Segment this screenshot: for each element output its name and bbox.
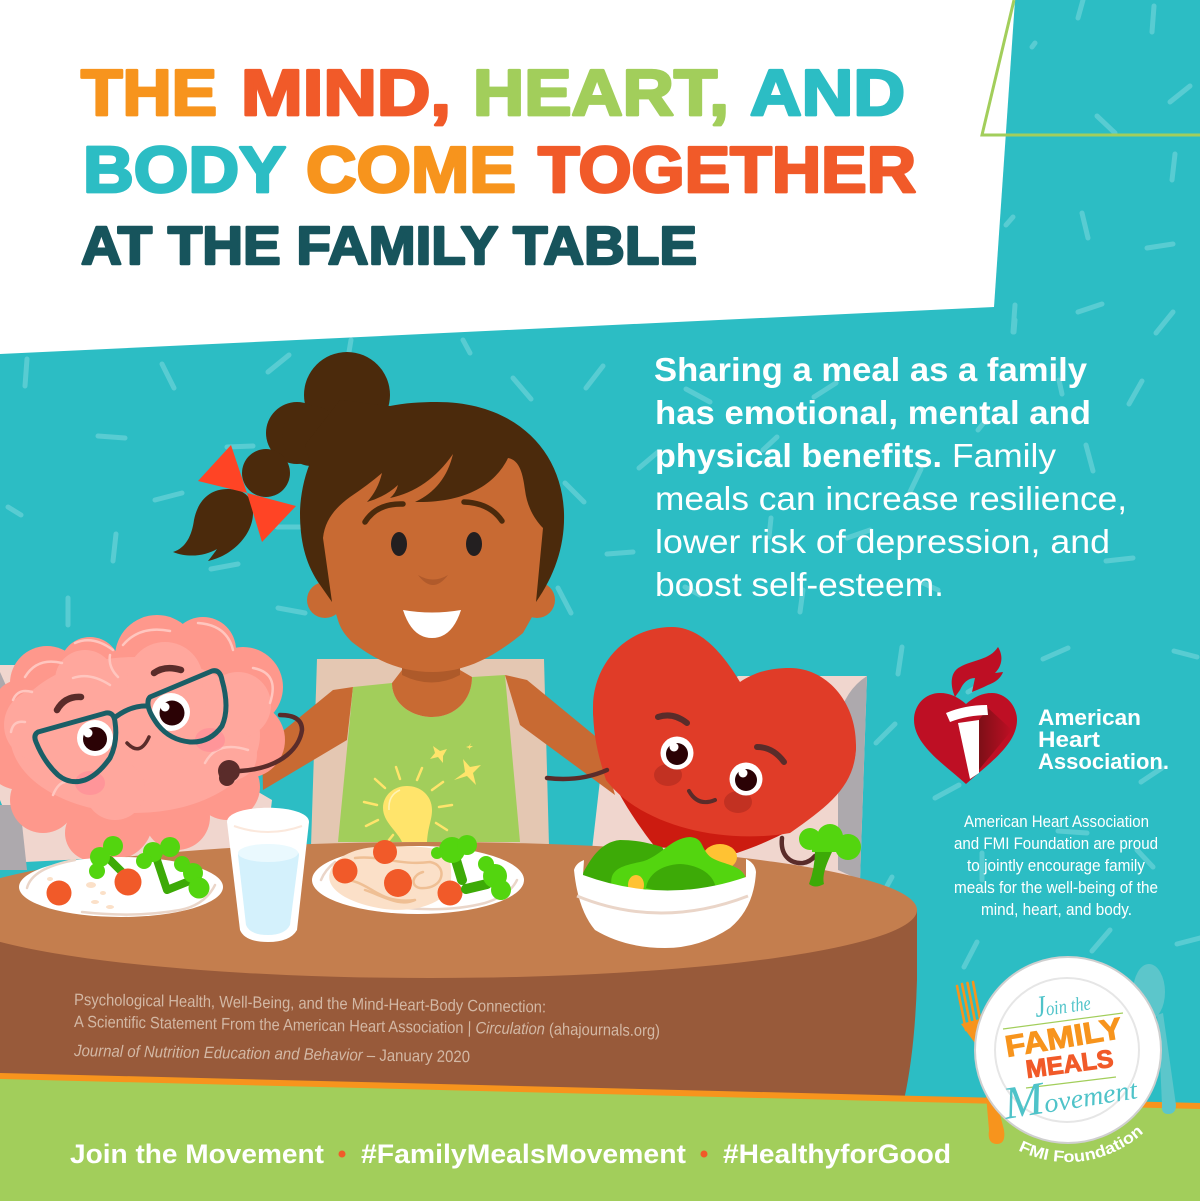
heart: blush [654, 764, 752, 813]
plate: brain side [19, 836, 223, 917]
heart: right arm [782, 838, 815, 863]
brain character [0, 615, 302, 861]
broccoli [89, 836, 210, 898]
intro text block: meals can increase resilience, [655, 480, 1127, 517]
chair: right [592, 676, 867, 880]
girl: neck shadow [402, 660, 460, 682]
salad: bright leaves [611, 837, 745, 896]
salad: yellow pieces behind [703, 844, 737, 870]
brain: lighter face area [4, 642, 271, 820]
intro text block: has emotional, mental and [655, 394, 1091, 431]
brain: blush [75, 728, 225, 795]
small broccoli by heart [799, 824, 861, 886]
table [0, 842, 917, 1100]
girl: shirt [338, 660, 520, 842]
meatballs [332, 840, 462, 906]
partnership statement [954, 812, 1158, 919]
chair: left [0, 665, 272, 870]
salad: dark inner leaf [646, 864, 716, 895]
brain: smile [127, 737, 149, 749]
brain: glasses [35, 671, 226, 782]
hashtags bar: #FamilyMealsMovement [361, 1139, 686, 1169]
brain: eyes [77, 693, 190, 756]
Family Meals Movement badge [956, 956, 1176, 1162]
intro text block [654, 351, 1127, 603]
title: line one [81, 56, 905, 129]
brain: lobes [0, 615, 285, 861]
logo: wordmark: American [1038, 705, 1141, 730]
logo: wordmark [1038, 705, 1169, 774]
heart character [547, 627, 856, 863]
source citations: Psychological Health, Well-Being, and the Mind-Heart-Body Connection: [74, 991, 546, 1016]
brain: arm and hand [218, 715, 302, 786]
source citations: A Scientific Statement From the American Heart Association | Circulation (ahajournals.org) [74, 1013, 660, 1040]
bottom green band [0, 1073, 1200, 1201]
heart: smile [689, 791, 715, 802]
water glass [227, 808, 309, 942]
logo: heart [914, 693, 1017, 784]
girl: eyes [391, 532, 482, 556]
source citations: Journal of Nutrition Education and Behavior – January 2020 [73, 1042, 470, 1066]
American Heart Association logo [914, 647, 1169, 784]
hashtags bar: Join the Movement [70, 1139, 324, 1169]
badge: rules [1003, 1013, 1123, 1088]
heart: main shape [593, 627, 856, 836]
intro text block: Sharing a meal as a family [654, 351, 1088, 388]
partnership statement: meals for the well-being of the [954, 878, 1158, 897]
badge: spoon [1133, 964, 1176, 1114]
girl: smile [403, 610, 461, 638]
heart: shadow side [593, 707, 856, 853]
title panel [0, 0, 1200, 354]
girl: hair bow [198, 445, 296, 542]
badge: meals: MEALS [1024, 1045, 1115, 1084]
logo: wordmark: Heart [1038, 727, 1101, 752]
title: line one: HEART, [473, 56, 729, 129]
partnership statement: and FMI Foundation are proud [954, 834, 1158, 853]
heart: eyebrows [658, 715, 784, 762]
badge: family: FAMILY [1003, 1012, 1125, 1064]
shirt lightbulb graphic [364, 743, 481, 842]
bowl body [574, 859, 756, 948]
badge: fork [957, 982, 1004, 1144]
badge: plate [975, 957, 1161, 1143]
girl: hair bun and braid [173, 352, 564, 602]
title: line one: MIND, [241, 56, 451, 129]
intro text block: lower risk of depression, and [655, 523, 1110, 560]
girl: ears [307, 582, 555, 618]
partnership statement: American Heart Association [964, 812, 1149, 831]
heart: eyes [660, 736, 762, 796]
partnership statement: to jointly encourage family [967, 856, 1145, 875]
title: line one: AND [750, 56, 905, 129]
hashtags bar: #HealthyforGood [723, 1139, 951, 1169]
logo: flame [952, 647, 1003, 697]
intro text block: physical benefits. [655, 437, 942, 474]
title: line two: COME [306, 133, 516, 206]
girl: arms [262, 675, 615, 795]
girl [173, 352, 615, 842]
intro text block: Family [952, 437, 1057, 474]
title: line three: AT THE FAMILY TABLE [81, 216, 697, 276]
title: line one: THE [81, 56, 217, 129]
badge: join the: Join the [1032, 983, 1093, 1024]
salad bowl [574, 837, 756, 948]
brain: eyebrows [57, 668, 181, 710]
chair: center [311, 659, 549, 846]
salad: dark leaves [582, 840, 690, 895]
partnership statement: mind, heart, and body. [981, 900, 1132, 919]
broccoli [431, 835, 511, 900]
intro text block: boost self-esteem. [655, 566, 944, 603]
plate: pasta and meatballs [312, 835, 524, 914]
heart: left arm [547, 770, 607, 779]
table: top [0, 842, 917, 978]
title: line two: TOGETHER [538, 133, 916, 206]
logo: wordmark: Association. [1038, 749, 1169, 774]
logo: torch [946, 705, 988, 779]
title: line two [83, 133, 916, 206]
table: side [0, 910, 917, 1100]
badge: FMI Foundation: FMI Foundation [1019, 1128, 1143, 1162]
girl: eyebrows [365, 502, 502, 522]
brain: highlights [11, 623, 273, 795]
tomatoes [46, 880, 72, 906]
girl: nose [418, 575, 448, 585]
pasta [329, 846, 451, 910]
badge: movement: Movement [999, 1057, 1141, 1129]
source citations [73, 991, 660, 1066]
hashtags bar [70, 1139, 951, 1169]
title: line two: BODY [83, 133, 286, 206]
girl: face [323, 454, 543, 672]
